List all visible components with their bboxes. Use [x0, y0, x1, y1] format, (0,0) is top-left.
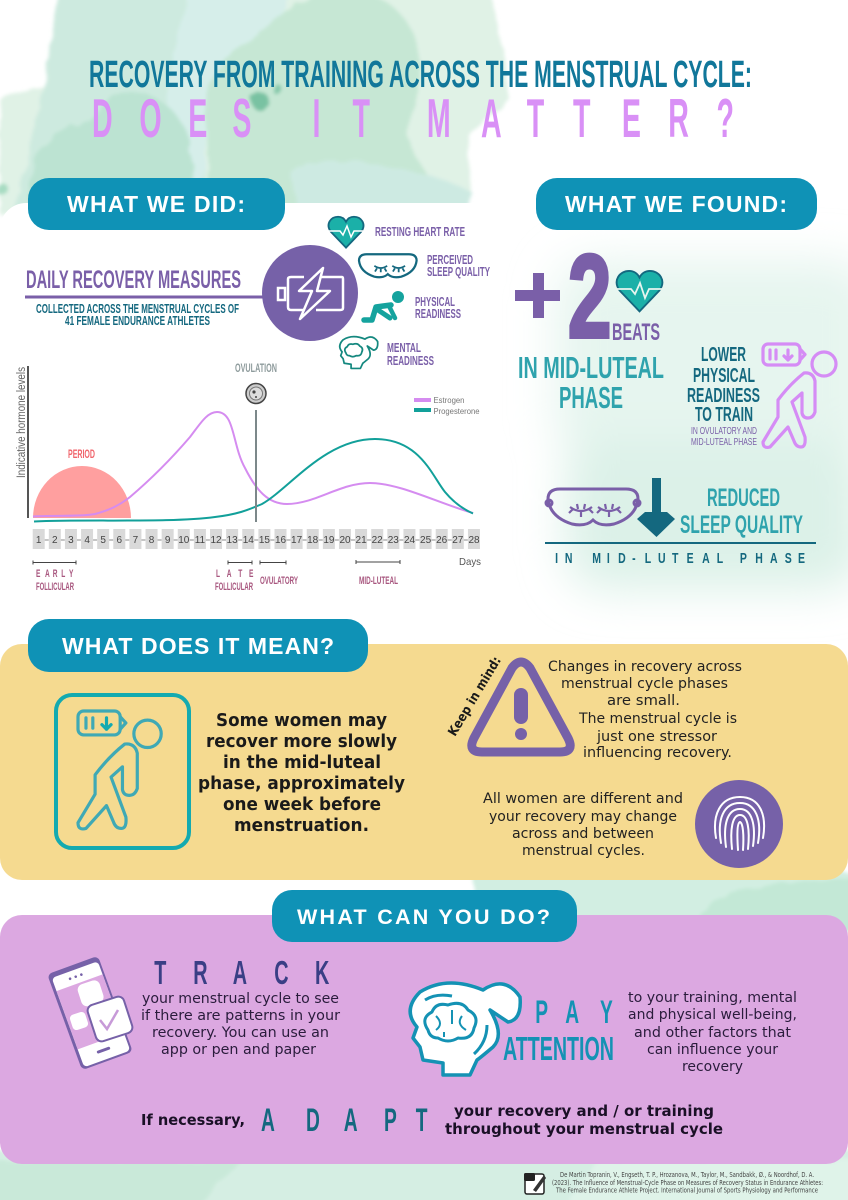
- heading pill: what can you do: [272, 890, 577, 942]
- phase brackets and labels: OVULATORY: [260, 575, 298, 587]
- track text: app or pen and paper: [161, 1042, 316, 1058]
- individual differences text: your recovery may change: [489, 809, 677, 825]
- phase brackets and labels: [33, 560, 400, 593]
- key message text: in the mid-luteal: [223, 753, 381, 773]
- track text: [141, 991, 340, 1058]
- pay attention text: and other factors that: [634, 1025, 792, 1041]
- day scale 1 to 28: 3: [68, 535, 74, 546]
- day scale 1 to 28: 25: [420, 535, 432, 546]
- day scale 1 to 28: 18: [307, 535, 319, 546]
- key message text: recover more slowly: [206, 732, 398, 752]
- day scale 1 to 28: 4: [84, 535, 90, 546]
- phase brackets and labels: FOLLICULAR: [36, 581, 74, 593]
- phase brackets and labels: MID-LUTEAL: [359, 575, 398, 587]
- day scale 1 to 28: 23: [388, 535, 399, 546]
- icon: battery with lightning bolt: [262, 245, 358, 341]
- pay attention text: [628, 990, 797, 1075]
- track heading: TRACK: [154, 954, 330, 991]
- day scale 1 to 28: 8: [149, 535, 155, 546]
- white main area: [0, 203, 848, 930]
- heading pill: what we did: [28, 178, 285, 230]
- label: physical readiness: READINESS: [415, 306, 461, 321]
- day scale 1 to 28: 20: [339, 535, 351, 546]
- keep in mind text: are small.: [607, 693, 680, 709]
- pay attention text: and physical well-being,: [628, 1007, 797, 1023]
- track text: your menstrual cycle to see: [142, 991, 339, 1007]
- pay attention heading: [503, 994, 614, 1067]
- heading pill: what we found: WHAT WE FOUND:: [565, 191, 787, 217]
- if necessary adapt line: your recovery and / or training: [454, 1102, 714, 1120]
- heading pill: what we found: [536, 178, 817, 230]
- icon: head with brain: [410, 983, 520, 1075]
- icon: heart: [328, 217, 363, 248]
- title: [89, 54, 752, 150]
- track text: recovery. You can use an: [152, 1025, 329, 1041]
- chart legend: Progesterone: [434, 407, 480, 416]
- daily recovery measures block: DAILY RECOVERY MEASURES: [26, 266, 241, 294]
- finding: lower physical readiness: PHYSICAL: [693, 365, 755, 387]
- finding: reduced sleep quality: IN MID-LUTEAL PHASE: [555, 549, 805, 566]
- icon: tired person frame: [56, 695, 189, 848]
- individual differences text: All women are different and: [483, 791, 683, 807]
- if necessary adapt line: throughout your menstrual cycle: [445, 1120, 723, 1138]
- key message text: phase, approximately: [198, 774, 406, 794]
- citation: [524, 1171, 823, 1194]
- if necessary adapt line: [141, 1102, 723, 1138]
- finding: lower physical readiness: READINESS: [687, 385, 760, 407]
- icon: fingerprint: [695, 780, 783, 868]
- estrogen curve: [33, 412, 473, 516]
- icon: down arrow: [637, 478, 675, 537]
- finding: lower physical readiness: MID-LUTEAL PHASE: [691, 437, 757, 448]
- pay attention heading: ATTENTION: [503, 1030, 614, 1067]
- phase brackets and labels: FOLLICULAR: [215, 581, 253, 593]
- finding: reduced sleep quality: REDUCED: [707, 484, 780, 512]
- day scale 1 to 28: 12: [210, 535, 222, 546]
- chart legend: Estrogen: [434, 396, 464, 405]
- day scale 1 to 28: 21: [356, 535, 367, 546]
- pay attention text: can influence your: [647, 1042, 778, 1058]
- day scale 1 to 28: 1: [36, 535, 42, 546]
- finding: plus two beats: IN MID-LUTEAL: [518, 350, 664, 385]
- icon: crawling person: [364, 291, 404, 320]
- icon: phone tracking app: [47, 956, 134, 1070]
- finding: lower physical readiness: TO TRAIN: [695, 404, 753, 426]
- icon: tired person with low battery: [763, 344, 836, 447]
- right column watercolour: [555, 260, 848, 590]
- key message text: Some women may: [216, 711, 388, 731]
- keep in mind text: menstrual cycle phases: [561, 676, 728, 692]
- day scale 1 to 28: 6: [117, 535, 123, 546]
- if necessary adapt line: ADAPT: [261, 1102, 428, 1138]
- phase brackets and labels: EARLY: [36, 567, 73, 579]
- finding: lower physical readiness: LOWER: [701, 344, 746, 366]
- daily recovery measures block: 41 FEMALE ENDURANCE ATHLETES: [65, 313, 210, 328]
- pay attention text: to your training, mental: [628, 990, 797, 1006]
- label: resting heart rate: RESTING HEART RATE: [375, 224, 465, 239]
- individual differences text: menstrual cycles.: [522, 843, 645, 859]
- day scale 1 to 28: 28: [468, 535, 480, 546]
- day scale 1 to 28: 10: [178, 535, 190, 546]
- label: mental readiness: MENTAL: [387, 340, 421, 355]
- panel: what does it mean: [0, 644, 848, 880]
- day scale 1 to 28: 9: [165, 535, 171, 546]
- panel: what can you do: [0, 915, 848, 1164]
- ovulation marker: OVULATION: [235, 361, 277, 375]
- day scale 1 to 28: 14: [243, 535, 254, 546]
- day scale 1 to 28: 16: [275, 535, 286, 546]
- day scale 1 to 28: 22: [372, 535, 383, 546]
- individual differences text: across and between: [512, 826, 654, 842]
- keep in mind text: The menstrual cycle is: [578, 711, 737, 727]
- key message text: menstruation.: [234, 816, 369, 836]
- period semicircle: PERIOD: [68, 447, 95, 461]
- period semicircle: [33, 447, 131, 518]
- hormone chart: [16, 361, 481, 593]
- day scale 1 to 28: 5: [100, 535, 106, 546]
- day scale 1 to 28: 7: [133, 535, 139, 546]
- keep in mind text: Changes in recovery across: [548, 659, 742, 675]
- heading pill: what can you do: WHAT CAN YOU DO?: [297, 905, 550, 929]
- label: mental readiness: [387, 340, 434, 368]
- keep in mind text: just one stressor: [596, 729, 717, 745]
- finding: plus two beats: 2: [568, 231, 611, 363]
- key message text: [198, 711, 406, 836]
- label: perceived sleep quality: PERCEIVED: [427, 252, 473, 267]
- phase brackets and labels: LATE: [216, 567, 253, 579]
- label: mental readiness: READINESS: [387, 353, 434, 368]
- finding: plus two beats: BEATS: [612, 319, 660, 346]
- individual differences text: [483, 791, 683, 859]
- icon: sleep mask large: [546, 489, 640, 525]
- lower watercolour strips: [0, 872, 848, 1200]
- finding: plus two beats: [515, 231, 664, 415]
- keep in mind: warning: Keep in mind:: [446, 654, 505, 739]
- pay attention heading: PAY: [535, 994, 613, 1030]
- finding: lower physical readiness: IN OVULATORY AND: [691, 426, 757, 437]
- chart legend: [414, 396, 480, 416]
- day scale 1 to 28: 15: [259, 535, 270, 546]
- daily recovery measures block: COLLECTED ACROSS THE MENSTRUAL CYCLES OF: [36, 301, 239, 316]
- icon: heart large: [617, 271, 662, 311]
- finding: plus two beats: PHASE: [559, 380, 623, 415]
- day scale 1 to 28: 11: [195, 535, 206, 546]
- finding: reduced sleep quality: [545, 478, 816, 566]
- day scale 1 to 28: 26: [436, 535, 448, 546]
- icon: sleep mask: [359, 254, 417, 277]
- day scale 1 to 28: 13: [227, 535, 238, 546]
- daily recovery measures block: [25, 266, 265, 328]
- track text: if there are patterns in your: [141, 1008, 340, 1024]
- chart y axis: Indicative hormone levels: [16, 367, 28, 478]
- subtitle: does it matter: DOES IT MATTER?: [92, 88, 734, 150]
- label: physical readiness: PHYSICAL: [415, 294, 455, 309]
- ovulation marker: [235, 361, 277, 522]
- keep in mind text: influencing recovery.: [583, 745, 732, 761]
- label: physical readiness: [415, 294, 461, 321]
- if necessary adapt line: If necessary,: [141, 1111, 245, 1129]
- day scale 1 to 28: 24: [404, 535, 415, 546]
- day scale 1 to 28: 17: [291, 535, 303, 546]
- keep in mind: warning: [446, 654, 570, 752]
- heading pill: what we did: WHAT WE DID:: [67, 191, 245, 217]
- pay attention text: recovery: [682, 1059, 743, 1075]
- finding: lower physical readiness: [687, 344, 836, 448]
- keep in mind text: [548, 659, 742, 761]
- heading pill: what does it mean: WHAT DOES IT MEAN?: [62, 633, 334, 659]
- day scale 1 to 28: 27: [452, 535, 464, 546]
- label: perceived sleep quality: SLEEP QUALITY: [427, 264, 490, 279]
- heading pill: what does it mean: [28, 619, 368, 672]
- progesterone curve: [34, 439, 473, 522]
- label: perceived sleep quality: [427, 252, 490, 279]
- icon: head with brain small: [340, 337, 378, 368]
- day scale 1 to 28: 2: [52, 535, 58, 546]
- days axis label: Days: [459, 556, 481, 568]
- day scale 1 to 28: 19: [323, 535, 335, 546]
- key message text: one week before: [223, 795, 381, 815]
- icon: note and pen: [524, 1173, 546, 1194]
- day scale 1 to 28: [33, 535, 481, 546]
